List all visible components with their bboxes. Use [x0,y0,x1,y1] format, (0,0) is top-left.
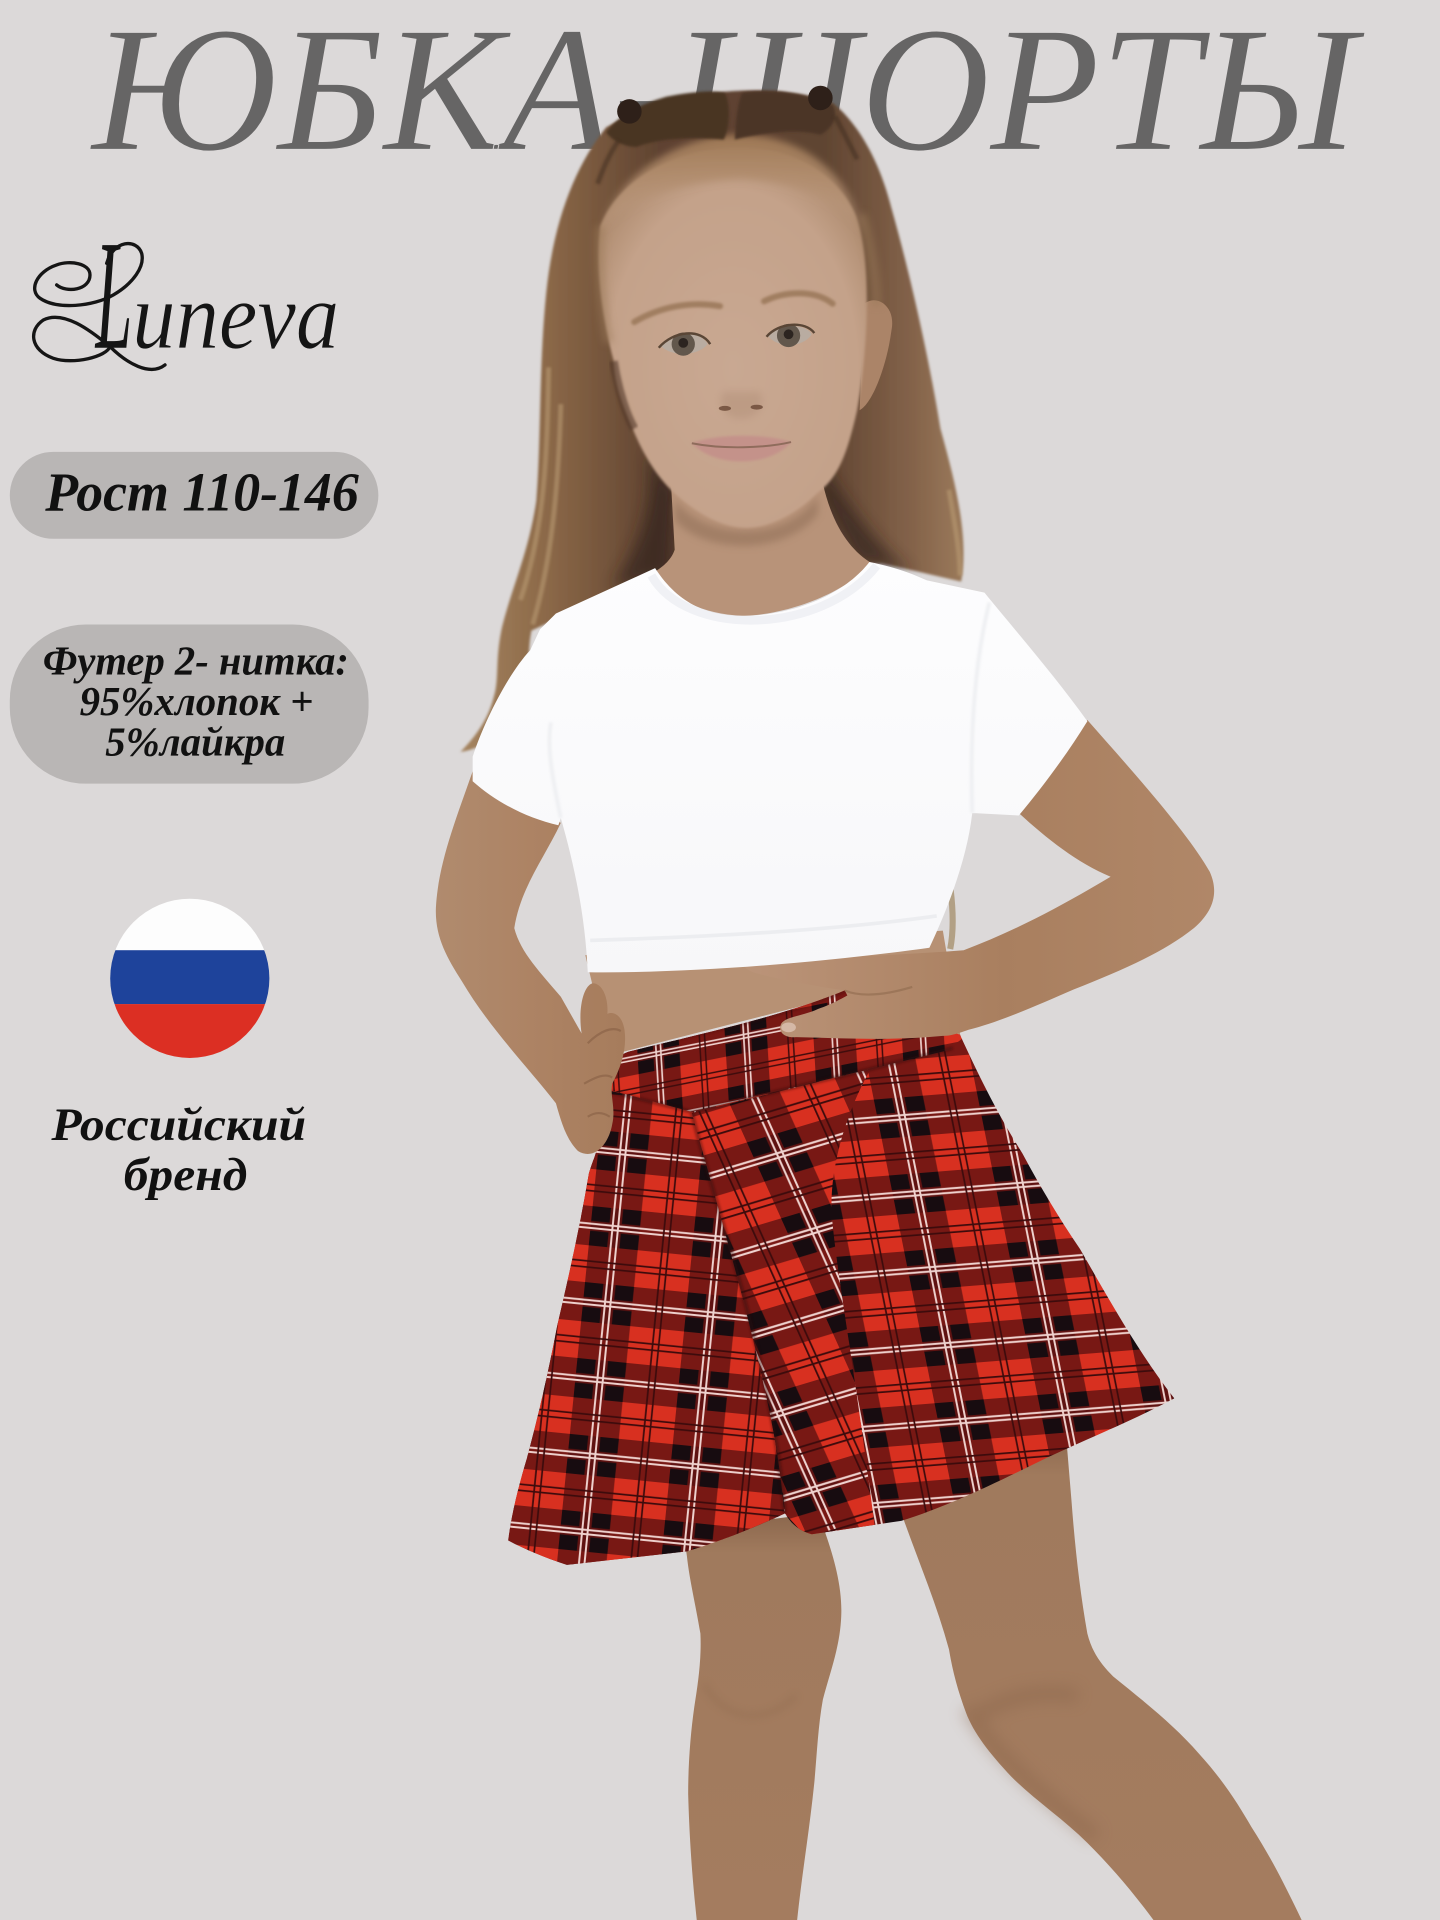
caption: Russian brand: бренд [124,1150,247,1201]
face [598,135,892,528]
hair back [460,90,964,752]
skirt-shorts [490,980,1188,1580]
icon: Russian flag circle [110,898,270,1058]
hair top [598,86,857,184]
left eye [659,332,710,356]
left panel [508,1091,784,1565]
right eye [767,324,814,347]
logo: Luneva [34,208,339,382]
badge: fabric composition [10,624,369,784]
photo: girl in plaid skirt-shorts [436,86,1302,1920]
forehead hairline [600,135,867,239]
nose [719,392,763,419]
right leg shading [967,1694,1096,1837]
badge: height range [10,452,378,539]
midriff [585,931,961,1053]
centre pleat [692,1069,877,1543]
left arm and hand [436,771,625,1154]
ear [860,300,892,410]
badge: fabric composition: 95%хлопок + [80,679,313,725]
side hair shadow [613,361,634,429]
t-shirt [473,562,1087,972]
badge: height range: Рост 110-146 [44,462,359,523]
right arm and hand [745,720,1214,1039]
badge: fabric composition: Футер 2- нитка: [43,639,349,685]
hair strand behind shirt [945,857,953,949]
logo: Luneva: L [95,208,132,382]
waistband [612,990,962,1112]
neck [653,484,872,616]
left knee detail [704,1684,796,1716]
skin [598,147,867,528]
badge: fabric composition: 5%лайкра [105,720,285,766]
right leg [904,1427,1302,1920]
mouth [692,436,791,462]
caption: Russian brand: Российский [50,1100,306,1151]
left leg [683,1512,841,1920]
logo: Luneva: uneva [132,263,339,369]
side hair [599,214,877,343]
eyebrows [634,293,833,322]
